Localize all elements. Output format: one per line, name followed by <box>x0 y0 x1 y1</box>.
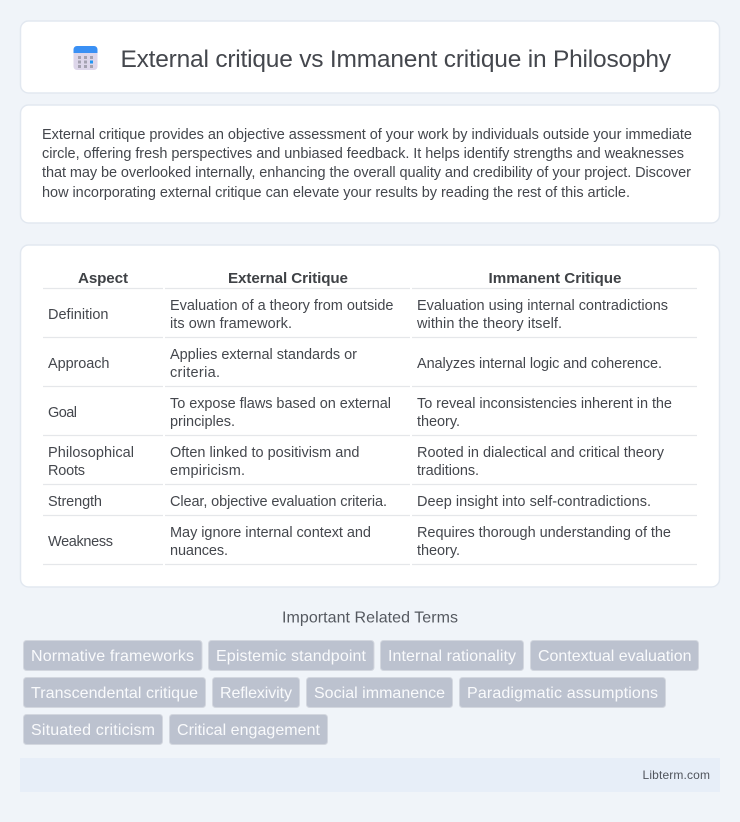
row: philosophical roots: Roots <box>48 463 85 479</box>
text block: introduction: how incorporating external critique can elevate your results by reading the rest of this article. <box>42 185 630 201</box>
row: approach: criteria. <box>170 365 220 381</box>
row: approach: Approach <box>48 356 110 372</box>
row: definition <box>48 298 668 332</box>
tag: Epistemic standpoint <box>216 648 367 665</box>
row: goal <box>48 396 672 430</box>
text block: introduction: circle, offering fresh perspectives and unbiased feedback. It helps identify strengths and weaknesses <box>42 146 684 162</box>
row: weakness: nuances. <box>170 543 228 559</box>
tag <box>306 678 452 708</box>
row: strength: Deep insight into self-contradictions. <box>417 494 651 510</box>
row: goal: To reveal inconsistencies inherent in the <box>417 396 672 412</box>
tag: Contextual evaluation <box>538 648 692 665</box>
row: approach: Analyzes internal logic and coherence. <box>417 356 662 372</box>
tag: Normative frameworks <box>31 648 194 665</box>
table header: Immanent Critique <box>488 270 622 287</box>
row: goal: To expose flaws based on external <box>170 396 391 412</box>
panel: comparison table <box>20 245 720 587</box>
text block: introduction: External critique provides an objective assessment of your work by individuals outside your immediate <box>42 127 692 143</box>
row: goal: principles. <box>170 414 235 430</box>
tag <box>24 714 162 744</box>
row: definition: within the theory itself. <box>416 316 562 332</box>
panel: header <box>20 21 720 93</box>
table header: Aspect <box>78 270 128 287</box>
row: philosophical roots <box>48 445 665 479</box>
tag <box>212 678 300 708</box>
title: External critique vs Immanent critique in Philosophy <box>120 46 672 73</box>
tag <box>460 678 666 708</box>
row: philosophical roots: empiricism. <box>170 463 245 479</box>
text block: introduction <box>42 127 692 201</box>
footer <box>20 758 720 792</box>
row: definition: Evaluation using internal contradictions <box>417 298 668 314</box>
row: philosophical roots: Often linked to positivism and <box>170 445 360 461</box>
tag <box>24 640 202 670</box>
row: weakness: May ignore internal context and <box>170 525 371 541</box>
tag <box>530 640 698 670</box>
panel: introduction <box>20 105 720 223</box>
tag: Internal rationality <box>388 648 516 665</box>
row: weakness: Weakness <box>48 534 113 550</box>
tag <box>24 678 206 708</box>
text block: introduction: that may be overlooked internally, enhancing the overall quality and credibility of your project. Discover <box>42 165 691 181</box>
row: weakness: Requires thorough understanding of the <box>417 525 671 541</box>
row: strength: Clear, objective evaluation criteria. <box>170 494 387 510</box>
row: definition: Definition <box>48 307 108 323</box>
table header: External Critique <box>228 270 348 287</box>
row: goal: theory. <box>417 414 460 430</box>
row: philosophical roots: traditions. <box>417 463 479 479</box>
tag <box>380 640 524 670</box>
row: philosophical roots: Rooted in dialectical and critical theory <box>417 445 665 461</box>
heading: important related terms: Important Related Terms <box>282 610 458 626</box>
table header <box>78 270 622 287</box>
row: strength: Strength <box>48 494 102 510</box>
icon: calendar <box>74 46 98 70</box>
row: goal: Goal <box>48 405 77 421</box>
tag list: related terms <box>24 640 698 744</box>
tag: Critical engagement <box>177 722 321 739</box>
footer: Libterm.com <box>642 768 710 782</box>
tag: Social immanence <box>314 685 445 702</box>
row: weakness <box>48 525 671 559</box>
row: definition: its own framework. <box>170 316 292 332</box>
row: definition: Evaluation of a theory from outside <box>170 298 394 314</box>
tag: Paradigmatic assumptions <box>467 685 658 702</box>
tag: Reflexivity <box>220 685 292 702</box>
tag <box>170 714 328 744</box>
row: approach: Applies external standards or <box>170 347 357 363</box>
row: philosophical roots: Philosophical <box>48 445 134 461</box>
row: weakness: theory. <box>417 543 460 559</box>
tag: Situated criticism <box>31 722 155 739</box>
tag: Transcendental critique <box>31 685 198 702</box>
row: approach <box>48 347 662 381</box>
tag <box>208 640 374 670</box>
row: strength <box>48 494 651 510</box>
